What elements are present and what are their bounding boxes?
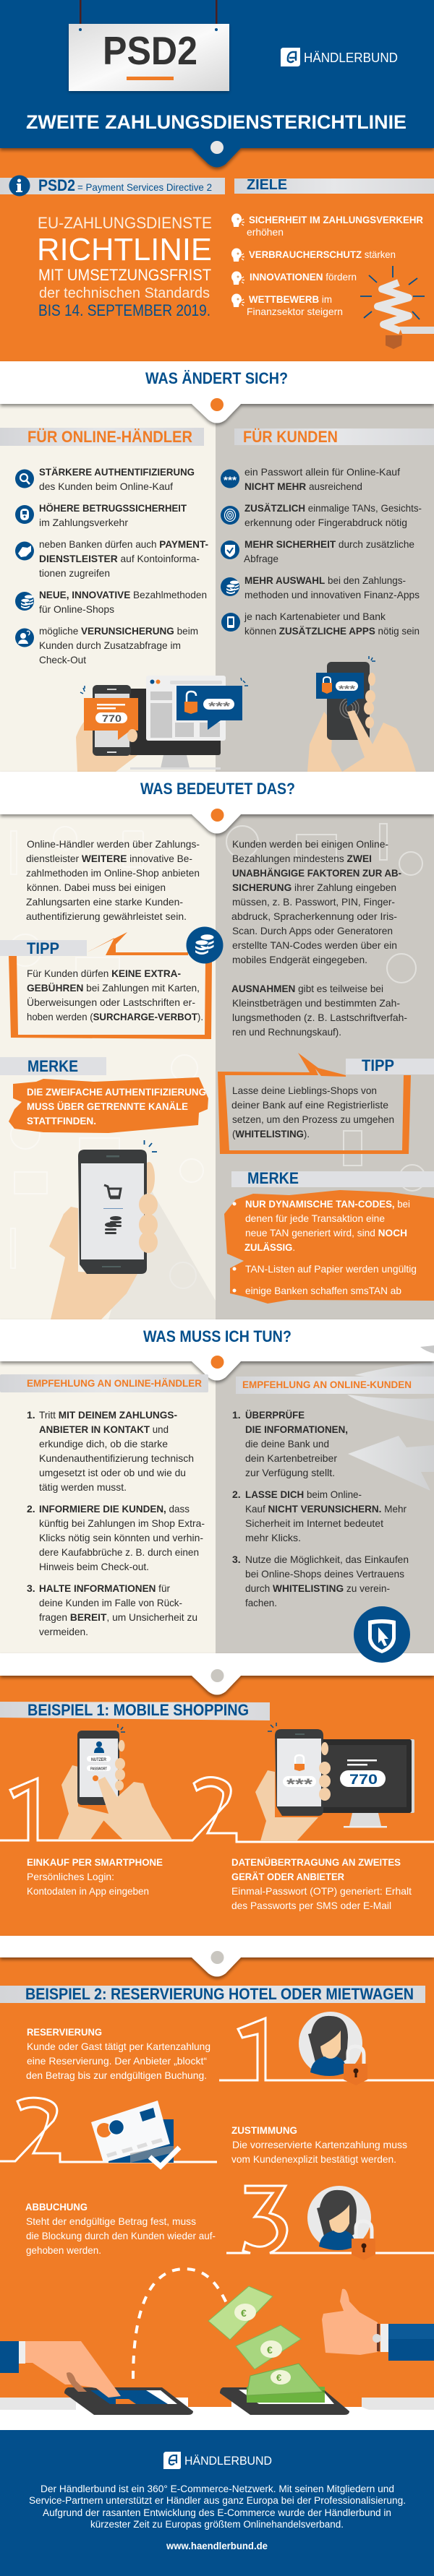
heading band: Für Online-Händler: FÜR ONLINE-HÄNDLER xyxy=(27,428,192,446)
text block: Kunden: Scan. Durch Apps oder Generatoren xyxy=(232,925,393,936)
step text: Datenübertragung xyxy=(231,1856,412,1911)
numbered list: merchants: vermeiden. xyxy=(39,1626,88,1637)
browser window xyxy=(146,676,226,741)
login fields: NUTZER xyxy=(91,1758,107,1762)
numbered list: merchants: HALTE INFORMATIONEN für xyxy=(39,1582,170,1594)
text block: Kunden: ren und Rechnungskauf). xyxy=(232,1026,341,1038)
text block: Online-Händler: authentifizierung gewährleistet sein. xyxy=(26,910,187,922)
text block: Kunden: erstellte TAN-Codes werden über ein xyxy=(232,939,397,951)
login fields xyxy=(87,1756,111,1772)
finger on phone xyxy=(127,729,137,742)
list: Ziele: Finanzsektor steigern xyxy=(247,306,343,317)
step text: Abbuchung: ABBUCHUNG xyxy=(25,2201,88,2213)
illustration: merchant devices with TAN and password bubbles xyxy=(76,676,248,772)
step text: Reservierung: Kunde oder Gast tätigt per Kartenzahlung xyxy=(27,2041,210,2052)
fingerprint xyxy=(340,698,359,718)
list: Für Kunden: ZUSÄTZLICH einmalige TANs, Gesichts- xyxy=(244,502,422,514)
step text: Einkauf per Smartphone: Persönliches Login: xyxy=(27,1871,114,1882)
list: Für Online-Händler: Kunden durch Zusatzabfrage im xyxy=(39,639,181,651)
text block: Online-Händler: dienstleister WEITERE innovative Be- xyxy=(26,853,192,864)
list: Ziele: VERBRAUCHERSCHUTZ stärken xyxy=(249,249,396,260)
numbered list: customers xyxy=(232,1409,409,1608)
numbered list: merchants: fragen BEREIT, um Unsicherheit zu xyxy=(39,1611,197,1623)
pointing hand xyxy=(342,710,416,772)
section backgrounds: Was muss ich tun xyxy=(0,1361,434,1653)
numbered list: customers: Sicherheit im Internet bedeutet xyxy=(245,1517,383,1529)
text block: Kunden: mobiles Endgerät eingegeben. xyxy=(232,954,367,965)
step text: Einkauf per Smartphone xyxy=(27,1856,163,1897)
list: Für Kunden: MEHR SICHERHEIT durch zusätzliche xyxy=(244,538,414,550)
signal rays xyxy=(80,678,248,694)
sleeve xyxy=(0,2341,19,2373)
text block: Kunden: Kleinstbeträgen und bestimmten Zah- xyxy=(232,997,400,1009)
numbered list: merchants: 3. xyxy=(27,1582,35,1594)
callout: Tipp for merchants xyxy=(0,926,223,1039)
icon: user xyxy=(94,1741,104,1753)
signal rays xyxy=(369,656,375,661)
phone body xyxy=(78,1150,147,1274)
password pill: *** xyxy=(286,1776,313,1793)
numbered list: customers: LASSE DICH beim Online- xyxy=(245,1489,362,1500)
shadow xyxy=(109,1185,216,1319)
callout: Tipp for merchants: GEBÜHREN bei Zahlungen mit Karten, xyxy=(27,982,200,994)
section header: Was ändert sich xyxy=(0,361,434,423)
text block: about: kürzester Zeit zu Europas größtem Onlinehandelsverband. xyxy=(90,2519,344,2530)
callout: Merke for customers: MERKE xyxy=(247,1169,299,1187)
step text: Abbuchung: gehoben werden. xyxy=(26,2244,101,2256)
icon: smartphone xyxy=(221,613,240,632)
icon: shield with cursor xyxy=(354,1606,410,1663)
illustration: right tablet with money stack xyxy=(220,2387,349,2415)
fingers and pointing hand xyxy=(98,1740,172,1840)
text block: Kunden: lungsmethoden (z. B. Lastschriftverfah- xyxy=(232,1012,407,1023)
hanging sign with PSD2 xyxy=(69,0,229,91)
step text: Datenübertragung: Einmal-Passwort (OTP) generiert: Erhalt xyxy=(231,1885,412,1897)
text block: EU-Zahlungsdienste Richtlinie: MIT UMSETZUNGSFRIST xyxy=(38,266,211,284)
text block: Online-Händler: können. Dabei muss bei einigen xyxy=(27,882,166,893)
avatar with lock: step 1 xyxy=(299,2012,367,2085)
fingers xyxy=(319,1742,331,1801)
icon: coins xyxy=(221,577,239,596)
text block: Kunden: Kunden werden bei einigen Online- xyxy=(232,838,388,850)
heading band: Ziele: ZIELE xyxy=(247,177,287,193)
list: Für Online-Händler: NEUE, INNOVATIVE Bezahlmethoden xyxy=(39,589,207,600)
counter strip xyxy=(0,2398,434,2430)
list: Ziele: erhöhen xyxy=(247,226,284,238)
illustration: left tablet with finger xyxy=(0,2341,193,2415)
list: Für Kunden: je nach Kartenabieter und Bank xyxy=(244,611,386,622)
logo: Händlerbund header xyxy=(281,48,398,66)
heading band: Empfehlung an Online-Händler xyxy=(0,1374,208,1392)
section connector: white strip above Beispiel 1 xyxy=(0,1653,434,1695)
numbered list: merchants: Tritt MIT DEINEM ZAHLUNGS- xyxy=(39,1409,177,1421)
numbered list: customers: die deine Bank und xyxy=(245,1438,329,1449)
website link: www.haendlerbund.de xyxy=(166,2540,268,2551)
text block: about: Aufgrund der rasanten Entwicklung des E-Commerce wurde der Händlerbund in xyxy=(43,2507,391,2518)
numbered list: merchants: umgesetzt ist oder ob und wie du xyxy=(39,1467,186,1478)
icon: padlock xyxy=(15,505,34,524)
text block: Kunden xyxy=(231,838,407,1038)
numbered list: customers: zur Verfügung stellt. xyxy=(245,1467,335,1478)
monitor xyxy=(318,1739,414,1828)
password bubble xyxy=(316,673,364,707)
hand xyxy=(255,1770,318,1841)
TAN bubble xyxy=(84,698,138,740)
numbered list: customers: 1. xyxy=(232,1409,241,1421)
list: Ziele: WETTBEWERB im xyxy=(249,293,332,305)
hand xyxy=(76,715,137,772)
numbered list: customers: 2. xyxy=(232,1489,241,1500)
hanging sign with PSD2: PSD2 xyxy=(103,28,197,73)
text block: about xyxy=(29,2484,406,2530)
hands xyxy=(58,1765,109,1840)
callout: Tipp for customers: Lasse deine Lieblings-Shops von xyxy=(232,1085,377,1096)
callout: Tipp for merchants: hoben werden (SURCHARGE-VERBOT). xyxy=(27,1011,203,1022)
step text: Einkauf per Smartphone: EINKAUF PER SMARTPHONE xyxy=(27,1856,163,1868)
list: Ziele: INNOVATIONEN fördern xyxy=(250,271,357,283)
numbered list: merchants: dere Kaufabbrüche z. B. durch einen xyxy=(39,1546,199,1558)
logo: Händlerbund footer: HÄNDLERBUND xyxy=(184,2454,272,2468)
OTP display: 770 xyxy=(349,1772,378,1788)
numbered list: customers: Nutze die Möglichkeit, das Einkaufen xyxy=(245,1554,409,1565)
callout: Merke for merchants: STATTFINDEN. xyxy=(27,1115,96,1127)
callout: Merke for customers: neue TAN generiert wird, sind NOCH xyxy=(245,1227,407,1239)
step text: Zustimmung xyxy=(231,2124,407,2165)
step text: Zustimmung: ZUSTIMMUNG xyxy=(231,2124,297,2136)
callout: Merke for customers: ZULÄSSIG. xyxy=(244,1241,295,1253)
list: Für Online-Händler: tionen zugreifen xyxy=(39,567,110,579)
section connector: white strip above Beispiel 2 xyxy=(0,1936,434,1977)
step text: Reservierung: den Betrag bis zur endgültigen Buchung. xyxy=(26,2069,207,2081)
callout: Tipp for merchants: TIPP xyxy=(27,939,59,957)
title: ZWEITE ZAHLUNGSDIENSTERICHTLINIE xyxy=(26,111,407,133)
step text: Zustimmung: vom Kundenexplizit bestätigt werden. xyxy=(231,2153,396,2165)
numbered list: merchants: 2. xyxy=(27,1503,35,1515)
numbered list: merchants xyxy=(27,1409,205,1637)
section background: Beispiel 2 xyxy=(0,1957,434,2398)
list: Für Kunden: Abfrage xyxy=(244,553,278,564)
numbered list: merchants: Kundenauthentifizierung technisch xyxy=(39,1452,194,1464)
heading band: Empfehlung an Online-Kunden xyxy=(236,1377,434,1394)
info band: PSD2 definition: = Payment Services Directive 2 xyxy=(77,181,212,193)
callout: Tipp for customers xyxy=(218,1053,434,1154)
login fields: PASSWORT xyxy=(90,1767,107,1772)
phone xyxy=(275,1729,323,1816)
text block: Kunden: AUSNAHMEN gibt es teilweise bei xyxy=(231,983,383,994)
banknote xyxy=(247,2364,323,2395)
step text: Abbuchung xyxy=(25,2201,216,2256)
callout: Merke for merchants: MERKE xyxy=(27,1057,78,1075)
heading band: Für Kunden xyxy=(234,428,434,446)
numbered list: merchants: ANBIETER IN KONTAKT und xyxy=(39,1423,169,1435)
section header: Was ändert sich: WAS ÄNDERT SICH? xyxy=(145,369,288,387)
numbered list: merchants: erkundige dich, ob die starke xyxy=(39,1438,168,1449)
callout: Tipp for merchants: Überweisungen oder Lastschriften er- xyxy=(27,996,195,1008)
callout: Tipp for merchants: Für Kunden dürfen KEINE EXTRA- xyxy=(27,968,181,979)
phone xyxy=(327,662,370,740)
banknote: € xyxy=(276,2372,281,2383)
holding hand xyxy=(307,712,342,772)
callout: Merke for merchants xyxy=(0,1057,208,1133)
numbered list: customers: mehr Klicks. xyxy=(245,1532,301,1543)
numbered list: customers: dein Kartenbetreiber xyxy=(245,1452,337,1464)
callout: Merke for customers: einige Banken schaffen smsTAN ab xyxy=(245,1285,401,1296)
list: Für Online-Händler: STÄRKERE AUTHENTIFIZIERUNG xyxy=(39,466,195,478)
info band: PSD2 definition: PSD2 xyxy=(38,176,75,194)
text block: EU-Zahlungsdienste Richtlinie: RICHTLINIE xyxy=(37,232,212,267)
step text: Abbuchung: die Blockung durch den Kunden wieder auf- xyxy=(26,2230,216,2241)
list: Ziele xyxy=(231,214,423,317)
section backgrounds: Was ändert sich xyxy=(0,404,434,772)
heading band: Empfehlung an Online-Händler: EMPFEHLUNG AN ONLINE-HÄNDLER xyxy=(27,1377,202,1389)
phone xyxy=(77,1731,119,1805)
text block: Online-Händler: Zahlungsarten eine starke Kunden- xyxy=(26,896,183,908)
signal rays xyxy=(268,1723,276,1731)
step text: Datenübertragung: GERÄT ODER ANBIETER xyxy=(231,1871,344,1882)
list: Für Online-Händler: im Zahlungsverkehr xyxy=(39,517,128,528)
step text: Reservierung: eine Reservierung. Der Anbieter „blockt“ xyxy=(27,2055,207,2067)
outline number 1 line xyxy=(219,2018,434,2080)
text block: Kunden: SICHERUNG ihrer Zahlung eingeben xyxy=(232,882,396,893)
text block: EU-Zahlungsdienste Richtlinie: BIS 14. SEPTEMBER 2019. xyxy=(38,301,210,319)
callout: Tipp for customers: TIPP xyxy=(362,1056,394,1074)
list: Für Kunden: ein Passwort allein für Online-Kauf xyxy=(244,466,400,478)
callout: Merke for customers: TAN-Listen auf Papier werden ungültig xyxy=(245,1263,417,1275)
password bubble xyxy=(176,686,242,730)
signal rays xyxy=(118,1724,125,1732)
avatar with lock: step 3 xyxy=(307,2186,375,2260)
list: Für Kunden: MEHR AUSWAHL bei den Zahlungs- xyxy=(244,574,406,586)
icon: coins xyxy=(15,592,34,611)
illustration: phone and monitor with OTP xyxy=(255,1723,414,1841)
text block: EU-Zahlungsdienste Richtlinie xyxy=(37,214,212,319)
list: Für Online-Händler: HÖHERE BETRUGSSICHERHEIT xyxy=(39,502,187,514)
section backgrounds: Was bedeutet das xyxy=(0,814,434,1319)
list: Für Online-Händler: mögliche VERUNSICHERUNG beim xyxy=(39,625,198,637)
section header: Was bedeutet das: WAS BEDEUTET DAS? xyxy=(140,780,295,798)
step text: Zustimmung: Die vorreservierte Kartenzahlung muss xyxy=(232,2139,407,2150)
numbered list: customers: fachen. xyxy=(245,1597,277,1608)
icon: password stars xyxy=(221,470,239,488)
numbered list: customers: durch WHITELISTING zu verein- xyxy=(245,1582,390,1594)
outline number 3 line xyxy=(226,2186,434,2253)
password bubble: *** xyxy=(339,683,356,694)
hand xyxy=(49,1207,137,1319)
numbered list: merchants: deine Kunden im Falle von Rück- xyxy=(39,1597,182,1608)
section background: Beispiel 1 xyxy=(0,1676,434,1936)
callout: Merke for customers: denen für jede Transaktion eine xyxy=(245,1212,385,1224)
heading band: Beispiel 1: BEISPIEL 1: MOBILE SHOPPING xyxy=(27,1701,249,1719)
icon: confused person xyxy=(15,629,34,647)
numbered list: merchants: künftig bei Zahlungen im Shop Extra- xyxy=(39,1517,205,1529)
illustration: smartphone login xyxy=(58,1724,172,1840)
monitor xyxy=(129,689,221,770)
illustration: thumbs up hand xyxy=(322,2289,434,2361)
text block: Kunden: müssen, z. B. Passwort, PIN, Finger- xyxy=(232,896,395,908)
text block: Online-Händler xyxy=(26,838,200,922)
marker dot xyxy=(210,141,224,154)
numbered list: customers: bei Online-Shops deines Vertrauens xyxy=(245,1568,404,1580)
outline number 2 line xyxy=(0,2098,217,2162)
hand xyxy=(25,2341,121,2398)
fingers xyxy=(364,673,375,728)
icon: handshake xyxy=(15,542,34,561)
icon: magnifier xyxy=(15,470,34,488)
step text: Datenübertragung: DATENÜBERTRAGUNG AN ZWEITES xyxy=(231,1856,401,1868)
step text: Reservierung xyxy=(26,2026,210,2081)
decorative arrow: silver swoosh xyxy=(347,1362,434,1491)
password bubble: *** xyxy=(208,699,231,713)
icon: spiral light bulb xyxy=(360,266,434,349)
OTP display xyxy=(340,1759,386,1788)
icon: password stars: *** xyxy=(224,474,237,486)
heading band: Für Kunden: FÜR KUNDEN xyxy=(243,428,338,446)
icon: lock xyxy=(294,1755,305,1771)
text block: about: Service-Partnern unterstützt er Händler aus ganz Europa bei der Professionalisierung. xyxy=(29,2495,406,2506)
text block: about: Der Händlerbund ist ein 360° E-Commerce-Netzwerk. Mit seinen Mitgliedern und xyxy=(41,2484,394,2494)
phone xyxy=(93,685,131,756)
list: Für Kunden: erkennung oder Fingerabdruck nötig xyxy=(244,517,407,528)
icon: coin stack xyxy=(105,1216,122,1234)
outline numbers 1 and 2 line xyxy=(0,1778,434,1842)
step text: Reservierung: RESERVIERUNG xyxy=(27,2026,102,2038)
step text: Datenübertragung: des Passworts per SMS oder E-Mail xyxy=(231,1900,391,1911)
callout: Tipp for customers: setzen, um den Prozess zu umgehen xyxy=(232,1113,394,1125)
illustration: falling money xyxy=(208,2286,323,2395)
banknote: € xyxy=(241,2307,247,2319)
list: Für Kunden: NICHT MEHR ausreichend xyxy=(244,481,362,492)
icon: info xyxy=(9,175,30,197)
text block: EU-Zahlungsdienste Richtlinie: der technischen Standards xyxy=(39,285,210,301)
callout: Merke for merchants: MUSS ÜBER GETRENNTE KANÄLE xyxy=(27,1100,188,1112)
list: Für Online-Händler xyxy=(15,466,208,665)
illustration: customer phone with fingerprint xyxy=(307,656,416,772)
numbered list: merchants: tätig werden musst. xyxy=(39,1481,127,1493)
TAN bubble: 770 xyxy=(102,712,122,724)
list: Für Kunden: können ZUSÄTZLICHE APPS nötig sein xyxy=(244,625,420,637)
text block: Kunden: abdruck, Spracherkennung oder Iris- xyxy=(231,910,397,922)
numbered list: merchants: Hinweis beim Check-out. xyxy=(39,1561,149,1572)
signal rays xyxy=(145,1140,157,1152)
numbered list: customers: 3. xyxy=(232,1554,241,1565)
icon: fingerprint xyxy=(221,506,239,525)
icon: shield xyxy=(221,540,239,559)
numbered list: merchants: 1. xyxy=(27,1409,35,1421)
list: Für Online-Händler: DIENSTLEISTER auf Kontoinforma- xyxy=(39,553,200,564)
list: Für Kunden xyxy=(221,466,422,637)
list: Ziele: SICHERHEIT IM ZAHLUNGSVERKEHR xyxy=(249,214,423,225)
numbered list: merchants: INFORMIERE DIE KUNDEN, dass xyxy=(39,1503,190,1515)
list: Für Online-Händler: Check-Out xyxy=(39,654,86,665)
heading band: Empfehlung an Online-Kunden: EMPFEHLUNG AN ONLINE-KUNDEN xyxy=(242,1379,412,1390)
banknote xyxy=(208,2286,273,2340)
callout: Merke for customers xyxy=(224,1169,434,1304)
icon: credit card with check xyxy=(91,2101,179,2166)
text block: Kunden: Bezahlungen mindestens ZWEI xyxy=(232,853,372,864)
text block: Online-Händler: Online-Händler werden über Zahlungs- xyxy=(27,838,200,850)
step text: Einkauf per Smartphone: Kontodaten in App eingeben xyxy=(27,1885,149,1897)
logo: Händlerbund header: HÄNDLERBUND xyxy=(304,50,398,65)
step text: Abbuchung: Steht der endgültige Betrag fest, muss xyxy=(26,2215,196,2227)
text block: Online-Händler: zahlmethoden im Online-Shop anbieten xyxy=(26,867,200,879)
icon: cart xyxy=(104,1185,121,1198)
list: Für Online-Händler: neben Banken dürfen auch PAYMENT- xyxy=(39,538,208,550)
callout: Tipp for customers: (WHITELISTING). xyxy=(232,1128,310,1140)
callout: Merke for merchants: DIE ZWEIFACHE AUTHENTIFIZIERUNG xyxy=(27,1086,206,1098)
numbered list: merchants: Klicks nötig sein könnten und verhin- xyxy=(39,1532,203,1543)
logo: Händlerbund footer xyxy=(163,2452,272,2469)
banknote xyxy=(236,2325,301,2369)
numbered list: customers: Kauf NICHT VERUNSICHERN. Mehr xyxy=(245,1503,407,1515)
text block: Kunden: UNABHÄNGIGE FAKTOREN ZUR AB- xyxy=(232,867,401,879)
fingers xyxy=(139,1194,158,1253)
section header: Was bedeutet das xyxy=(0,772,434,834)
section header: Was muss ich tun xyxy=(0,1319,434,1380)
callout: Merke for customers: NUR DYNAMISCHE TAN-CODES, bei xyxy=(245,1198,410,1210)
list: Für Kunden: methoden und innovativen Finanz-Apps xyxy=(244,589,420,600)
banknote: € xyxy=(267,2344,273,2356)
section header: blue title block xyxy=(0,0,434,168)
list: Für Online-Händler: des Kunden beim Online-Kauf xyxy=(39,481,173,492)
numbered list: customers: ÜBERPRÜFE xyxy=(245,1409,305,1421)
section: footer xyxy=(0,2430,434,2576)
illustration: phone with cart and coins xyxy=(49,1140,216,1319)
dashed arc: payment path xyxy=(133,2269,226,2379)
callout: Tipp for customers: deiner Bank auf eine Registrierliste xyxy=(231,1099,388,1111)
text block: EU-Zahlungsdienste Richtlinie: EU-ZAHLUNGSDIENSTE xyxy=(38,214,212,232)
info band: PSD2 definition xyxy=(0,175,225,197)
section header: Was muss ich tun: WAS MUSS ICH TUN? xyxy=(143,1327,292,1345)
password pill xyxy=(283,1776,316,1793)
icon: coins xyxy=(187,926,223,964)
numbered list: customers: DIE INFORMATIONEN, xyxy=(245,1423,348,1435)
section background: orange intro xyxy=(0,148,434,361)
heading band: Ziele xyxy=(234,177,434,194)
list: Für Online-Händler: für Online-Shops xyxy=(39,603,114,615)
